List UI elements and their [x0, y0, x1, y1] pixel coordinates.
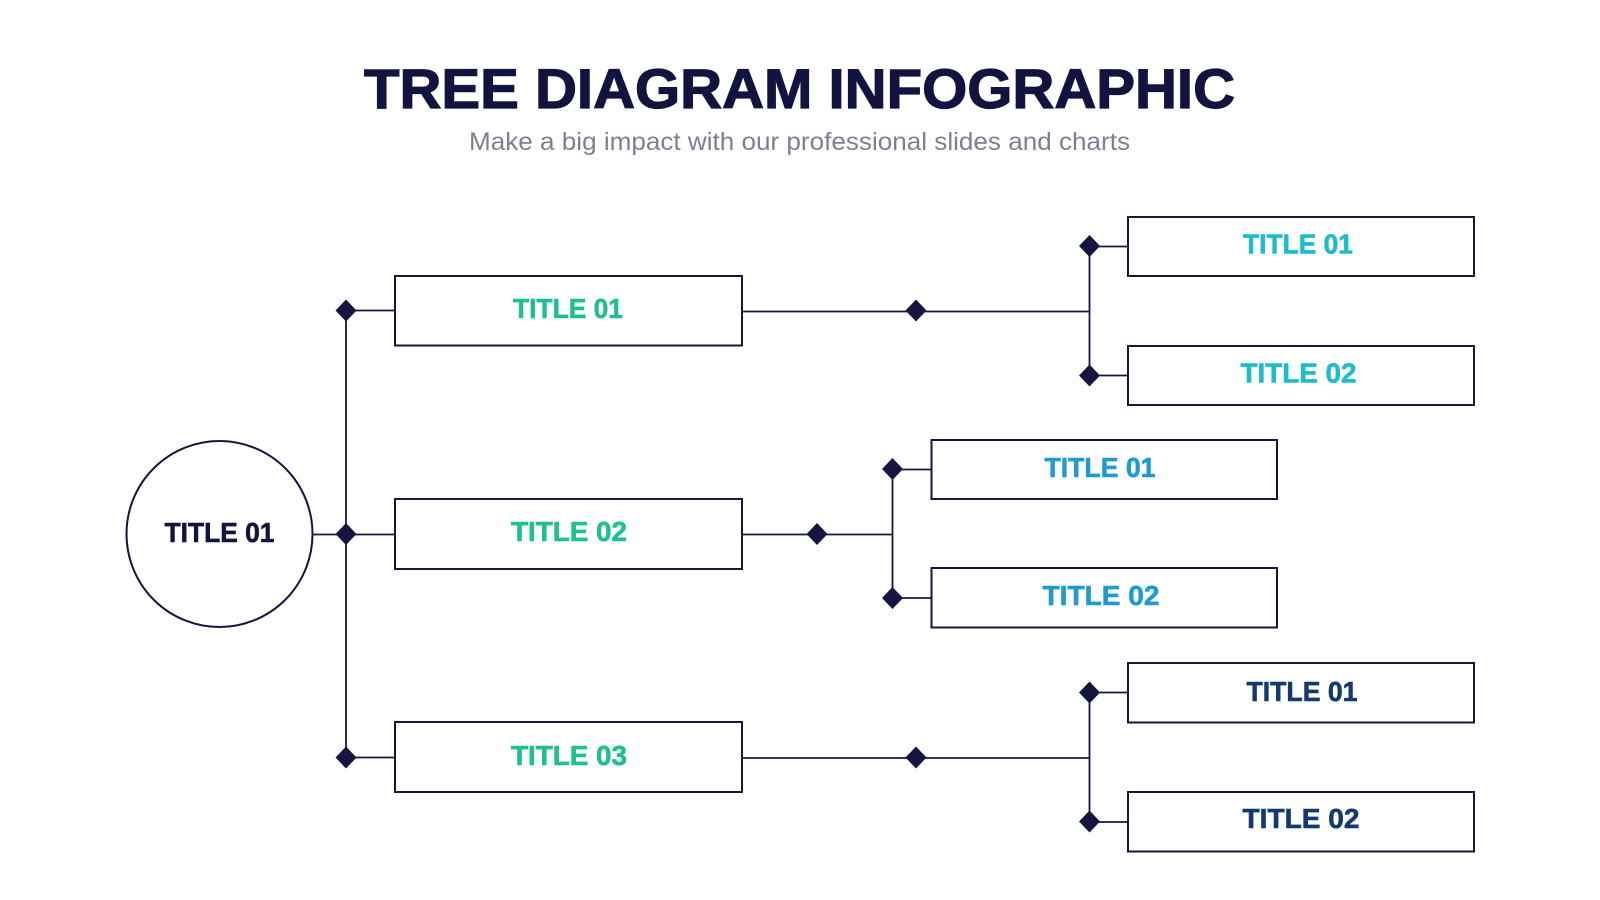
leaf box: top title 01: [1128, 217, 1474, 276]
leaf box: top title 01: TITLE 01: [1243, 228, 1353, 260]
branch box: title 01: TITLE 01: [513, 293, 623, 324]
leaf box: bottom title 01: TITLE 01: [1246, 676, 1358, 707]
root node: TITLE 01: [164, 517, 274, 548]
leaf box: middle title 02: TITLE 02: [1042, 580, 1160, 611]
branch box: title 03: [395, 722, 742, 792]
leaf box: top title 02: TITLE 02: [1240, 358, 1356, 388]
branch box: title 02: TITLE 02: [511, 516, 627, 547]
leaf box: bottom title 02: TITLE 02: [1242, 803, 1360, 834]
diamond markers: [336, 235, 1100, 832]
leaf box: middle title 01: [932, 440, 1277, 499]
tree connectors: [313, 246, 1128, 822]
title: TREE DIAGRAM INFOGRAPHIC: [364, 57, 1235, 120]
branch box: title 01: [395, 276, 742, 346]
leaf box: bottom title 02: [1128, 792, 1474, 852]
branch box: title 02: [395, 499, 742, 569]
root node: [126, 441, 312, 627]
leaf box: bottom title 01: [1128, 663, 1474, 722]
branch box: title 03: TITLE 03: [511, 740, 627, 771]
leaf box: middle title 02: [932, 568, 1277, 628]
subtitle: Make a big impact with our professional slides and charts: [469, 128, 1130, 156]
leaf box: middle title 01: TITLE 01: [1044, 452, 1156, 483]
leaf box: top title 02: [1128, 346, 1474, 405]
